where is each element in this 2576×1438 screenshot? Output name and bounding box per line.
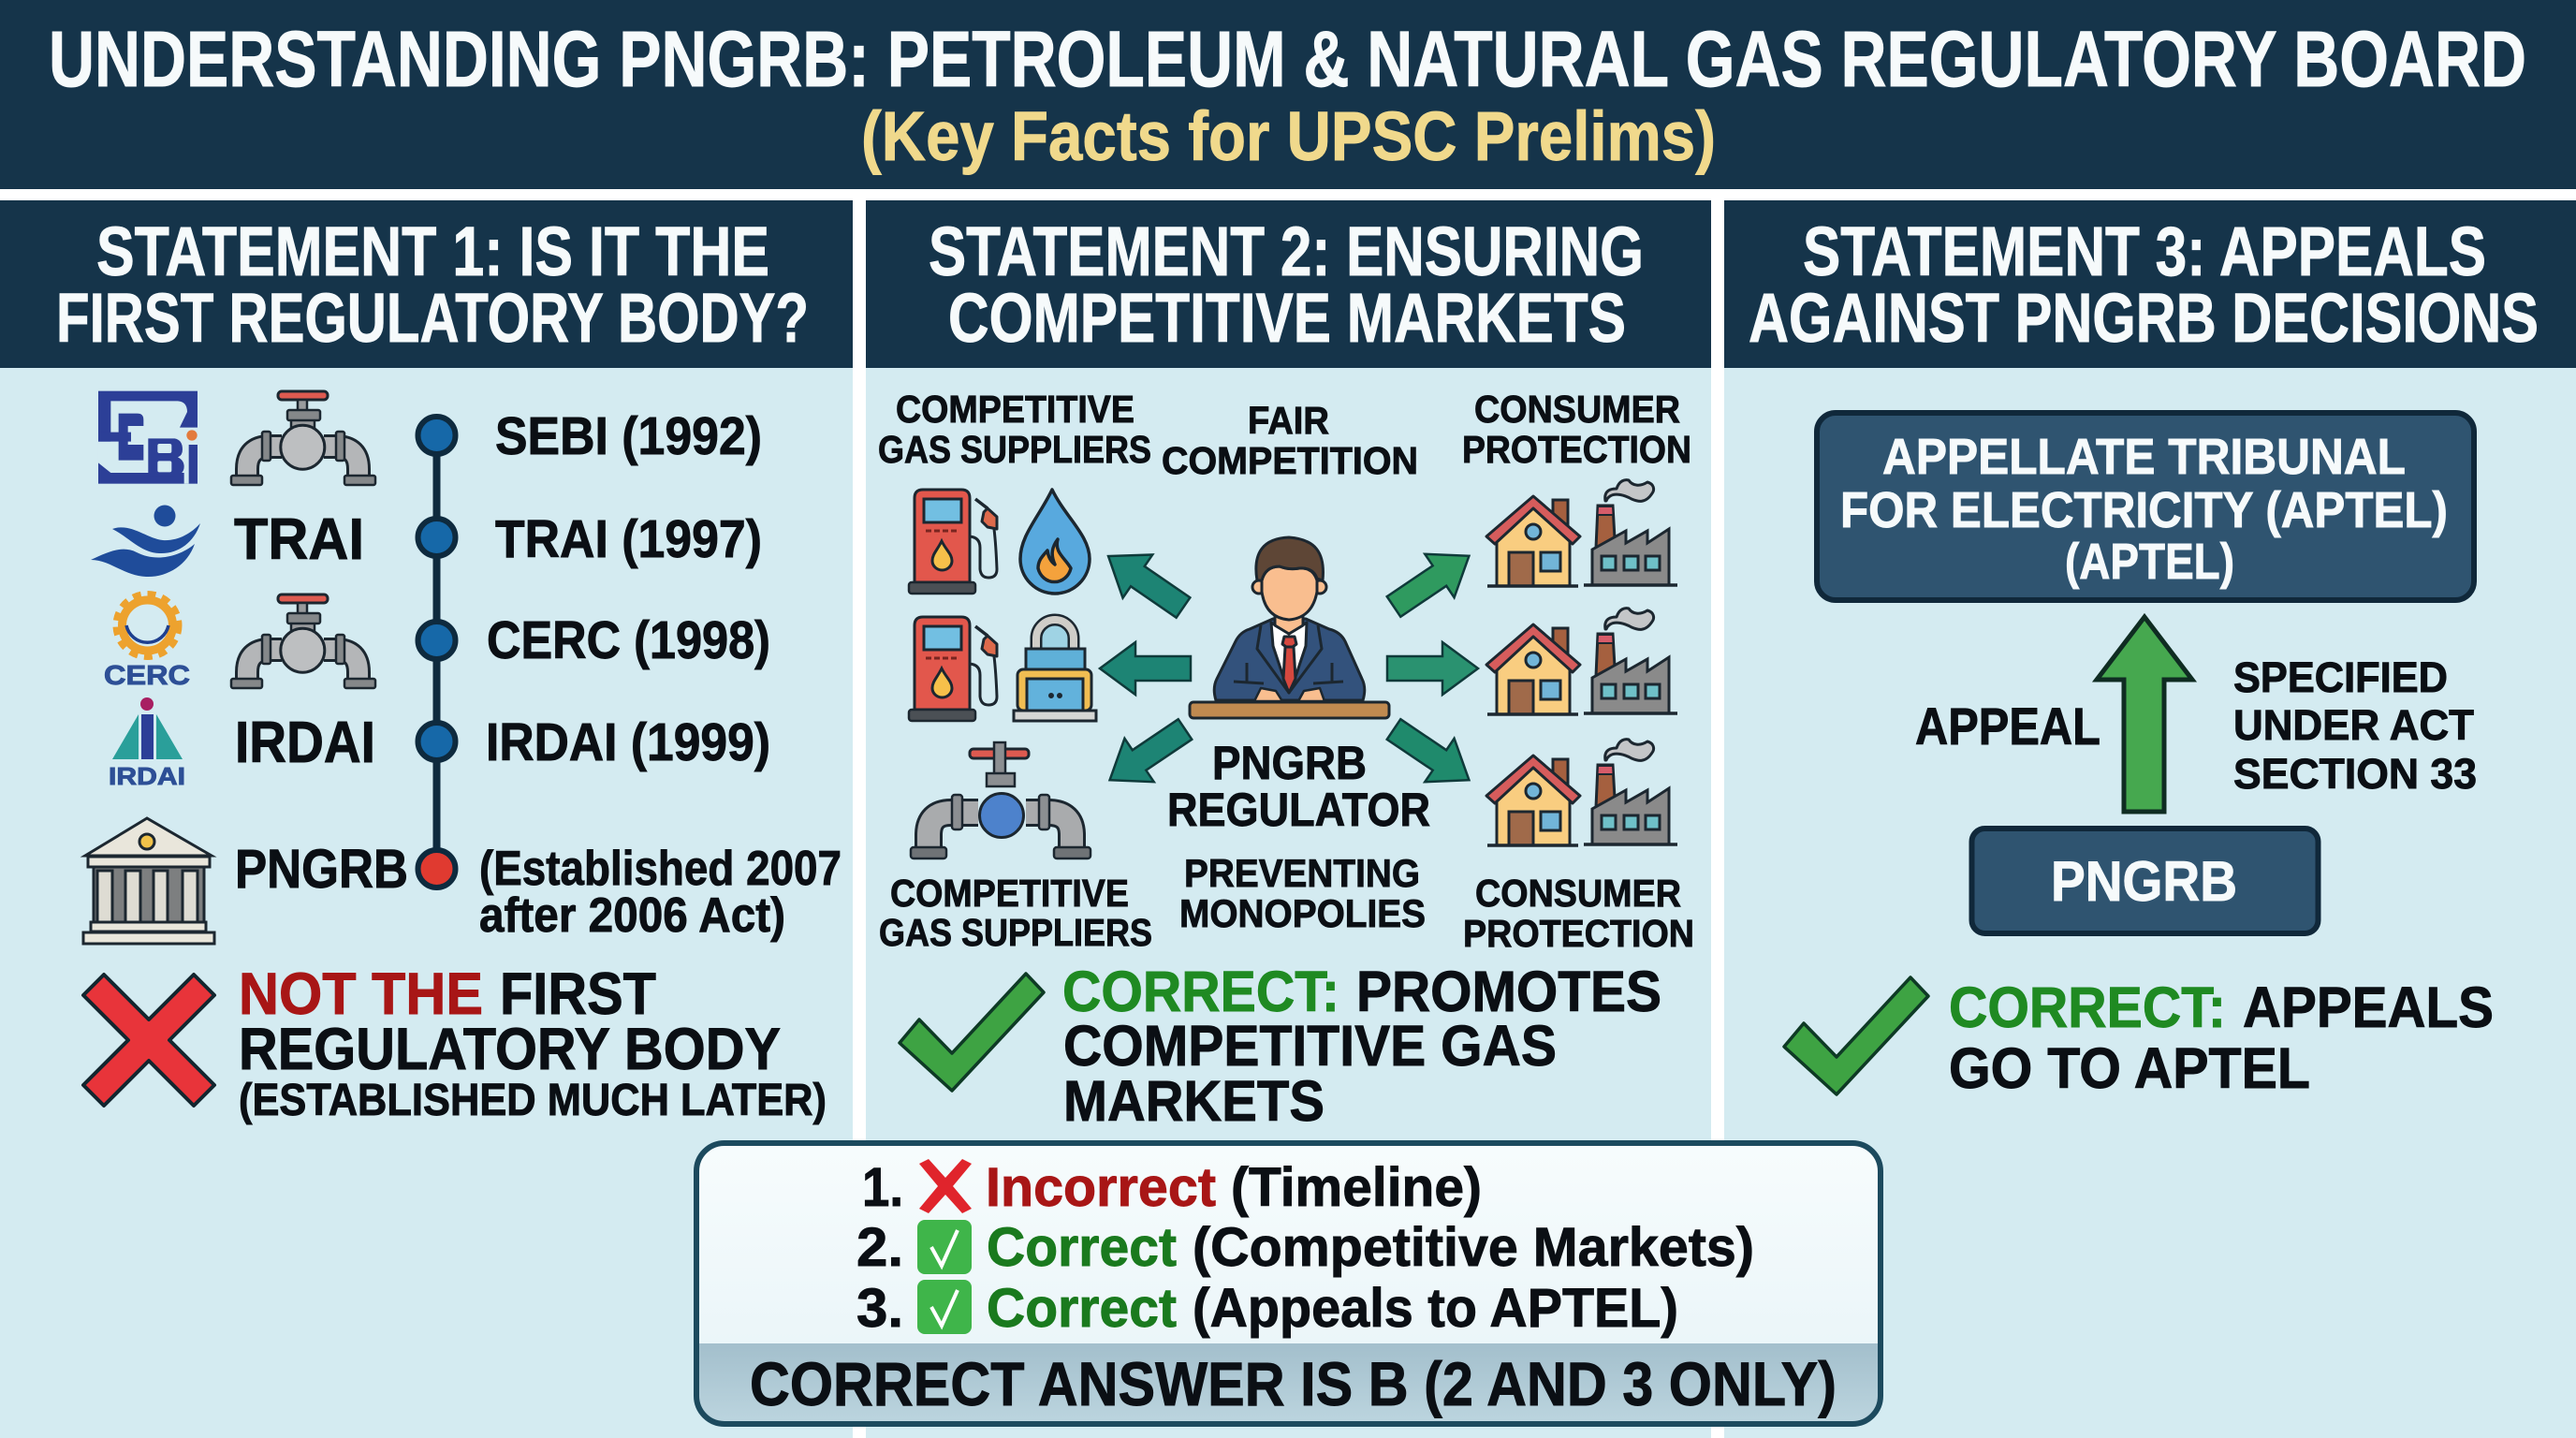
label: competitive gas suppliers top: GAS SUPPLIERS: [878, 428, 1151, 471]
summary line 1: (Timeline): [1231, 1157, 1482, 1218]
timeline labels: CERC (1998): [487, 610, 770, 670]
verdict: not the first: [239, 961, 827, 1125]
icon: SEBI logo: [98, 391, 198, 484]
verdict: promotes competitive gas markets: [1062, 960, 1661, 1133]
label: consumer protection bottom: [1463, 872, 1694, 955]
label: consumer protection bottom: PROTECTION: [1463, 912, 1694, 955]
icon: green check: [900, 974, 1044, 1091]
label: competitive gas suppliers bottom: COMPETITIVE: [890, 872, 1129, 915]
heading: statement 2: STATEMENT 2: ENSURING: [929, 213, 1644, 290]
summary line 3: [856, 1278, 1678, 1339]
icon: gas flame drop: [1020, 490, 1090, 594]
label: TRAI: TRAI: [234, 507, 364, 572]
timeline labels: IRDAI (1999): [486, 712, 770, 772]
label: appeal: APPEAL: [1915, 697, 2100, 756]
box: APTEL: [1817, 413, 2474, 600]
arrow: appeal up: [2097, 617, 2192, 812]
summary line 2: 2.: [856, 1217, 903, 1278]
icon: valve 1: [231, 391, 375, 485]
icon: IRDAI logo: IRDAI: [109, 762, 185, 790]
timeline labels: [479, 406, 842, 943]
arrow: to upper right: [1379, 535, 1484, 628]
label: specified under act section 33: UNDER ACT: [2233, 701, 2474, 749]
label: competitive gas suppliers bottom: [879, 872, 1152, 954]
summary box: [696, 1143, 1881, 1424]
icon: pipeline valve: [911, 742, 1090, 858]
label: preventing monopolies: [1179, 851, 1426, 935]
icon: regulator person at desk: [1190, 537, 1389, 718]
label: preventing monopolies: PREVENTING: [1184, 851, 1420, 895]
label: fair competition: [1162, 399, 1418, 482]
verdict: not the first: REGULATORY BODY: [239, 1017, 781, 1082]
timeline labels: (Established 2007: [479, 842, 842, 896]
label: specified under act section 33: [2233, 653, 2477, 798]
icon: government building: [83, 818, 214, 944]
timeline labels: SEBI (1992): [495, 406, 762, 466]
icon: house 2: [1486, 624, 1580, 714]
arrow: to upper left: [1093, 535, 1198, 629]
verdict: appeals go to APTEL: [1949, 976, 2494, 1100]
box: APTEL: FOR ELECTRICITY (APTEL): [1840, 482, 2448, 538]
verdict: promotes competitive gas markets: COMPETITIVE GAS: [1063, 1014, 1557, 1078]
label: fair competition: COMPETITION: [1162, 439, 1418, 482]
label: fair competition: FAIR: [1248, 399, 1329, 442]
correct answer: CORRECT ANSWER IS B (2 AND 3 ONLY): [750, 1349, 1837, 1418]
icon: green check: [1784, 977, 1928, 1094]
timeline labels: TRAI (1997): [495, 509, 762, 569]
summary line 3: 3.: [856, 1278, 903, 1339]
summary line 3: Correct: [987, 1278, 1177, 1339]
icon: factory 2: [1584, 609, 1677, 713]
title banner: [0, 0, 2576, 189]
icon: fuel pump 2: [909, 617, 997, 721]
label: PNGRB regulator: [1167, 737, 1430, 836]
label: consumer protection top: PROTECTION: [1462, 428, 1691, 471]
icon: IRDAI logo: [109, 697, 185, 790]
summary line 2: Correct: [987, 1217, 1177, 1278]
verdict: appeals go to APTEL: APPEALS: [2243, 976, 2494, 1039]
arrow: to lower left: [1095, 708, 1200, 801]
verdict: promotes competitive gas markets: CORRECT:: [1062, 960, 1339, 1023]
subtitle: (Key Facts for UPSC Prelims): [861, 97, 1716, 175]
icon: padlock: [1014, 620, 1096, 721]
label: competitive gas suppliers bottom: GAS SUPPLIERS: [879, 911, 1152, 954]
summary line 1: Incorrect: [986, 1157, 1216, 1218]
heading: statement 1: FIRST REGULATORY BODY?: [56, 279, 809, 357]
heading: statement 2: [866, 200, 1711, 368]
verdict: not the first: FIRST: [500, 961, 656, 1027]
arrow: to lower right: [1379, 708, 1484, 801]
timeline labels: after 2006 Act): [479, 888, 785, 943]
box: APTEL: APPELLATE TRIBUNAL: [1882, 429, 2406, 485]
timeline: [417, 417, 455, 888]
heading: statement 3: [1724, 200, 2576, 368]
icon: TRAI logo: [91, 506, 200, 577]
box: PNGRB: [1971, 829, 2318, 933]
panel: statement 3 appeals: [1724, 200, 2576, 1438]
verdict: promotes competitive gas markets: PROMOTES: [1356, 960, 1661, 1023]
verdict: promotes competitive gas markets: MARKETS: [1063, 1069, 1325, 1133]
label: IRDAI: IRDAI: [235, 711, 375, 775]
arrow: to left: [1100, 642, 1191, 695]
icon: CERC logo: CERC: [104, 661, 190, 691]
label: competitive gas suppliers top: [878, 388, 1151, 471]
icon: house 3: [1486, 756, 1580, 845]
verdict: not the first: (ESTABLISHED MUCH LATER): [239, 1076, 827, 1125]
label: consumer protection top: CONSUMER: [1474, 388, 1680, 431]
label: consumer protection bottom: CONSUMER: [1475, 872, 1681, 915]
box: PNGRB: PNGRB: [2051, 850, 2237, 913]
icon: fuel pump 1: [909, 490, 997, 594]
icon: factory 3: [1584, 740, 1677, 844]
verdict: appeals go to APTEL: CORRECT:: [1949, 976, 2226, 1039]
label: PNGRB regulator: REGULATOR: [1167, 784, 1430, 836]
icon: red cross: [83, 975, 214, 1106]
label: competitive gas suppliers top: COMPETITIVE: [896, 388, 1134, 431]
summary line 1: 1.: [862, 1157, 903, 1218]
icon: house 1: [1486, 496, 1580, 586]
verdict: not the first: NOT THE: [239, 961, 483, 1027]
label: PNGRB regulator: PNGRB: [1212, 737, 1367, 789]
icon: CERC logo: [104, 594, 190, 691]
summary line 1: [862, 1157, 1482, 1218]
summary line 2: (Competitive Markets): [1193, 1217, 1754, 1278]
verdict: appeals go to APTEL: GO TO APTEL: [1949, 1036, 2310, 1100]
label: PNGRB: PNGRB: [235, 839, 408, 900]
summary line 3: (Appeals to APTEL): [1193, 1278, 1678, 1339]
panel: statement 1 timeline: [0, 200, 853, 1438]
arrow: to right: [1387, 642, 1478, 695]
icon: factory 1: [1584, 480, 1677, 585]
heading: statement 1: [0, 200, 853, 368]
heading: statement 2: COMPETITIVE MARKETS: [948, 279, 1626, 357]
icon: valve 2: [231, 594, 375, 688]
label: specified under act section 33: SECTION 33: [2233, 750, 2477, 798]
label: preventing monopolies: MONOPOLIES: [1179, 891, 1426, 935]
panel: statement 2 competitive markets: [866, 200, 1711, 1438]
box: APTEL: (APTEL): [2065, 534, 2234, 590]
label: consumer protection top: [1462, 388, 1691, 471]
heading: statement 1: STATEMENT 1: IS IT THE: [96, 213, 769, 290]
label: specified under act section 33: SPECIFIED: [2233, 653, 2448, 701]
summary line 2: [856, 1217, 1754, 1278]
